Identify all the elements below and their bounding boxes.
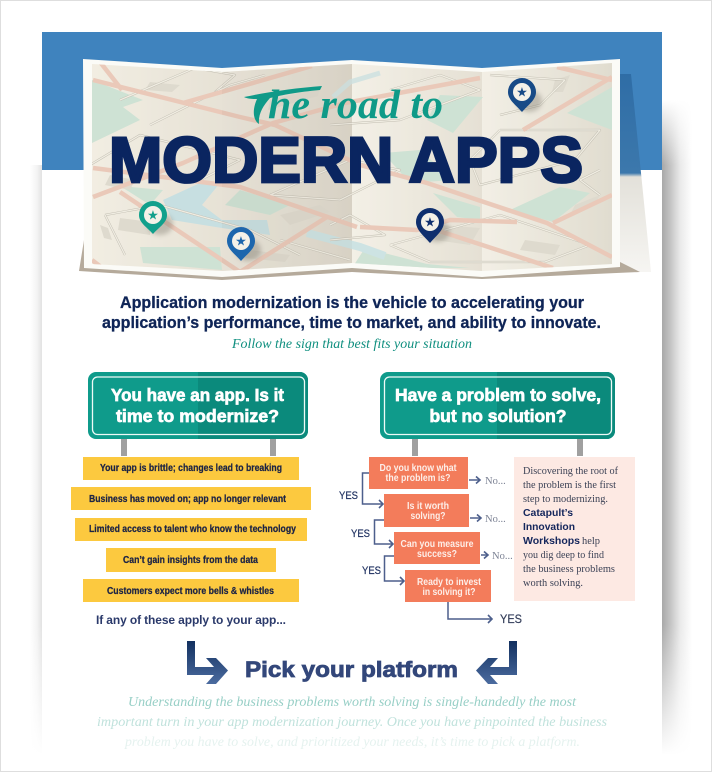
no arrows: No... — [485, 514, 506, 525]
road sign right: Have a problem: Have a problem to solve, — [395, 385, 601, 405]
card shadow: left — [30, 165, 42, 755]
step 3: success? — [417, 549, 457, 560]
callout: innovation workshops: Workshops — [523, 535, 580, 547]
step 3 — [394, 532, 480, 564]
list item 4: Can’t gain insights from the data — [123, 555, 258, 566]
closing paragraph, fading out: problem you have to solve, and prioritized your needs, it’s time to pick a platform. — [124, 735, 580, 750]
title: MODERN APPS: MODERN APPS — [109, 124, 583, 196]
yes labels: YES — [500, 612, 522, 626]
map pin: blue — [227, 227, 261, 261]
callout: innovation workshops: Innovation — [523, 521, 575, 533]
header blue band — [42, 32, 662, 170]
road sign left: You have an app — [88, 372, 308, 456]
yes labels: YES — [339, 490, 358, 502]
road sign left: You have an app: You have an app. Is it — [111, 385, 284, 405]
list item 5: Customers expect more bells & whistles — [107, 586, 274, 597]
closing paragraph, fading out — [97, 695, 608, 750]
step 2: Is it worth — [407, 501, 449, 512]
intro heading — [102, 294, 601, 332]
no arrows: No... — [492, 551, 513, 562]
step 1: the problem is? — [386, 473, 451, 484]
road sign left: You have an app: time to modernize? — [116, 406, 279, 426]
map pin: teal: ★ — [147, 208, 159, 222]
callout: innovation workshops: the business problems — [523, 563, 615, 575]
closing paragraph, fading out: Understanding the business problems worth solving is single-handedly the most — [128, 695, 577, 710]
yes labels — [339, 490, 522, 626]
road sign right: Have a problem — [380, 372, 615, 456]
step 2 — [384, 494, 469, 527]
intro heading: Application modernization is the vehicle to accelerating your — [120, 294, 585, 312]
map pin: navy bottom: ★ — [424, 214, 436, 230]
map pin: blue: ★ — [235, 234, 247, 248]
title script: The road to: he road to — [268, 81, 443, 127]
no arrows — [469, 476, 513, 562]
step 1: Do you know what — [380, 463, 457, 474]
map illustration — [79, 59, 651, 280]
yes labels: YES — [351, 528, 370, 540]
yellow list: modernization signs — [71, 457, 311, 602]
map artwork — [90, 60, 612, 275]
callout: innovation workshops: step to modernizing. — [523, 493, 608, 505]
map pin: teal — [139, 201, 173, 235]
step 2: solving? — [410, 511, 446, 522]
intro subheading: Follow the sign that best fits your situation — [231, 336, 472, 351]
map pin: navy top right — [508, 78, 542, 112]
map cast shadow — [620, 74, 651, 272]
callout: innovation workshops: you dig deep to find — [523, 549, 605, 561]
flowchart — [339, 457, 522, 626]
list item 1 — [83, 457, 299, 480]
map pin: navy bottom — [416, 208, 450, 243]
map paper — [83, 59, 620, 277]
list item 2 — [71, 487, 311, 510]
list item 1: Your app is brittle; changes lead to breaking — [100, 463, 282, 474]
map pin: navy top right: ★ — [516, 84, 528, 100]
callout: innovation workshops: help — [582, 535, 600, 547]
map underside — [79, 240, 640, 280]
list conclusion: If any of these apply to your app... — [96, 613, 286, 627]
yes labels: YES — [362, 565, 381, 577]
step 4: in solving it? — [422, 587, 476, 598]
callout: innovation workshops — [514, 457, 635, 601]
step 4: Ready to invest — [417, 577, 482, 588]
step 1 — [369, 457, 468, 489]
step 4 — [405, 570, 491, 602]
list item 2: Business has moved on; app no longer relevant — [89, 494, 287, 505]
callout: innovation workshops: Discovering the root of — [523, 465, 618, 477]
list item 3 — [75, 518, 307, 541]
road sign right: Have a problem: but no solution? — [430, 406, 566, 426]
list item 4 — [106, 548, 276, 572]
card shadow: right — [662, 100, 692, 755]
heading: Pick your platform: Pick your platform — [245, 657, 458, 682]
callout: innovation workshops: worth solving. — [523, 577, 583, 589]
arrow: down and left — [476, 641, 517, 684]
intro heading: application’s performance, time to market, and ability to innovate. — [102, 314, 601, 332]
list item 3: Limited access to talent who know the technology — [89, 524, 296, 535]
closing paragraph, fading out: important turn in your app modernization journey. Once you have pinpointed the business — [97, 715, 608, 730]
callout: innovation workshops: Catapult’s — [523, 507, 573, 519]
yes connectors — [362, 473, 492, 623]
arrow: down and right — [187, 641, 228, 684]
callout: innovation workshops: the problem is the first — [523, 479, 616, 491]
step 3: Can you measure — [400, 539, 474, 550]
no arrows: No... — [485, 476, 506, 487]
list item 5 — [83, 579, 299, 602]
